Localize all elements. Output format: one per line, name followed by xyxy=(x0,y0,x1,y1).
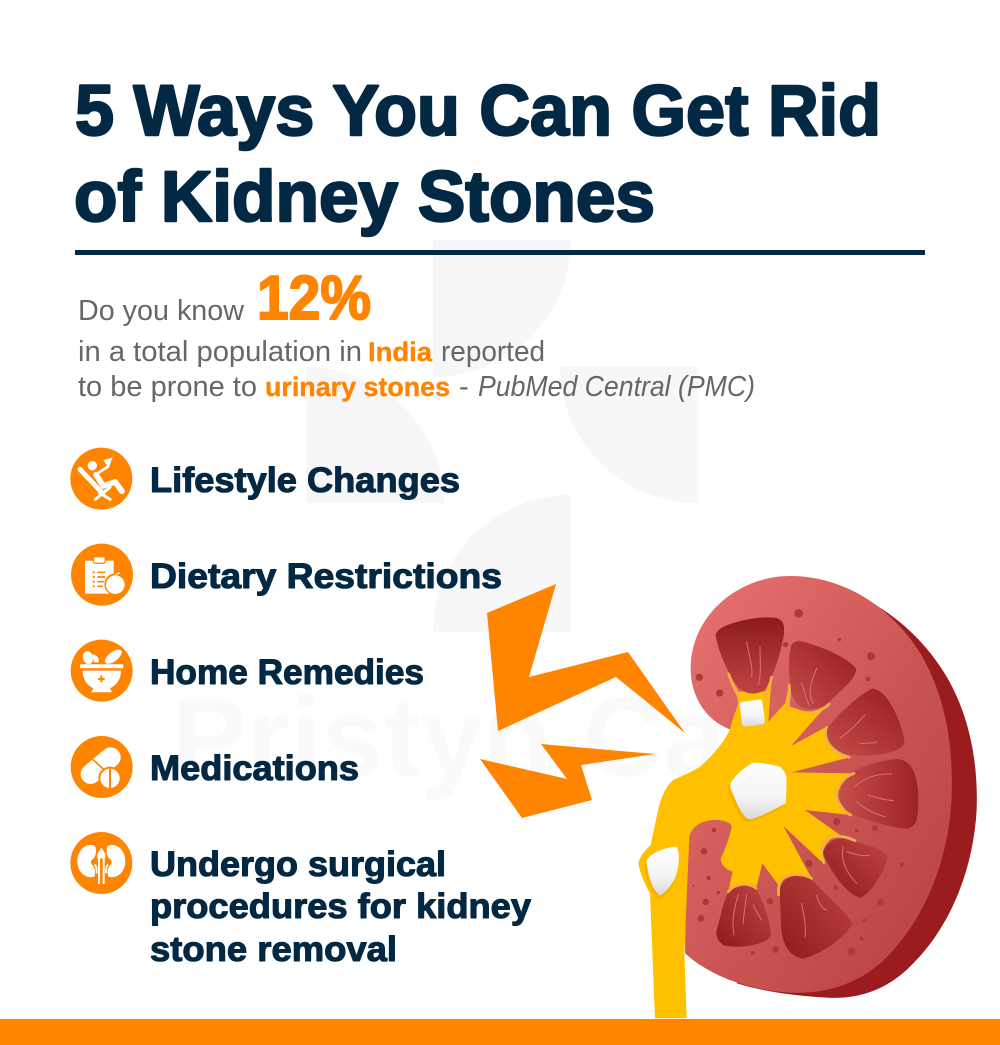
label: procedures for kidney xyxy=(150,887,532,926)
icon: pair of kidneys xyxy=(70,832,132,894)
icon: upper lightning bolt xyxy=(487,584,685,733)
title underline xyxy=(75,250,925,255)
intro statistic text: India xyxy=(368,337,433,367)
list item: medications xyxy=(71,736,359,798)
label: Dietary Restrictions xyxy=(150,557,502,596)
list item: dietary restrictions xyxy=(71,544,502,606)
icon: mortar bowl with herbs xyxy=(71,640,133,702)
intro statistic text: Do you know xyxy=(78,295,245,327)
intro statistic text: urinary stones xyxy=(265,372,450,402)
icon: lower lightning bolt xyxy=(480,744,655,818)
list item: surgical procedures xyxy=(70,832,532,969)
stone: upper calyx xyxy=(740,699,765,727)
watermark: background shapes and brand name: Pristyn Care xyxy=(172,675,832,800)
pyramid highlights xyxy=(733,642,893,937)
kidney outer shell xyxy=(737,582,977,998)
list item: lifestyle changes xyxy=(70,448,460,510)
icon: person reclining in a deck chair xyxy=(70,448,132,510)
kidney cut face xyxy=(685,576,952,993)
icon: capsule and tablet xyxy=(71,736,133,798)
title: of Kidney Stones xyxy=(74,158,655,237)
intro statistic text xyxy=(78,264,755,403)
renal pyramids xyxy=(719,620,915,956)
kidney tissue dots xyxy=(692,609,904,956)
title: 5 Ways You Can Get Rid xyxy=(75,72,881,151)
intro statistic text: - xyxy=(459,371,469,403)
label: Lifestyle Changes xyxy=(150,461,460,500)
label: stone removal xyxy=(150,930,397,969)
list item: home remedies xyxy=(71,640,424,702)
label: Medications xyxy=(150,749,359,788)
label: Undergo surgical xyxy=(150,845,446,884)
intro statistic text: in a total population in xyxy=(78,336,362,368)
watermark: background shapes and brand name xyxy=(172,240,832,800)
urine collecting system and ureter xyxy=(638,673,854,1018)
bottom bar xyxy=(0,1019,1000,1045)
stone shadows xyxy=(645,766,784,900)
calyx outlines xyxy=(728,674,855,895)
title xyxy=(74,72,881,237)
stone: ureter xyxy=(647,847,679,895)
intro statistic text: reported xyxy=(441,336,545,368)
label: Home Remedies xyxy=(150,653,424,692)
intro statistic text: 12% xyxy=(257,264,371,333)
icon: clipboard and apple xyxy=(71,544,133,606)
intro statistic text: PubMed Central (PMC) xyxy=(478,371,755,403)
stone: renal pelvis xyxy=(730,763,787,819)
kidney illustration xyxy=(638,576,977,1018)
intro statistic text: to be prone to xyxy=(78,371,257,403)
label xyxy=(150,845,532,969)
